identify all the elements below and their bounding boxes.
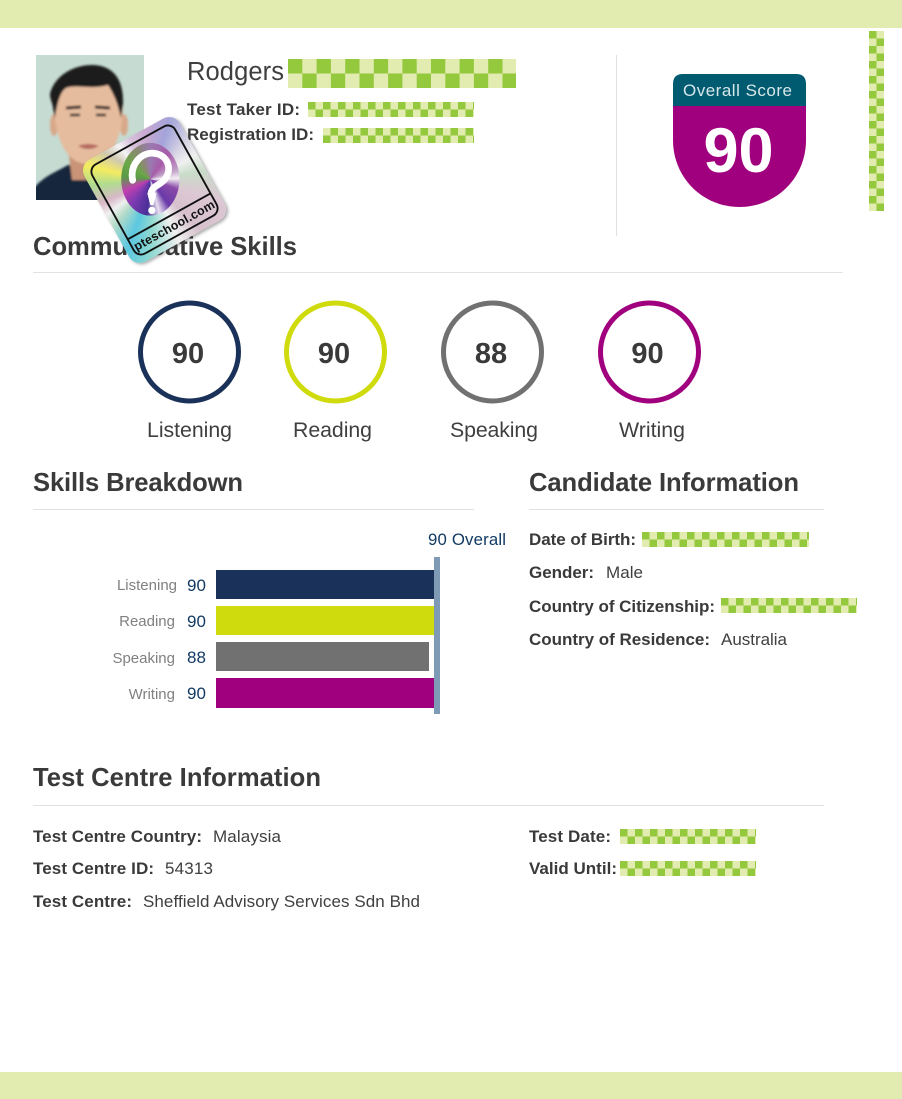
test taker id <box>187 100 474 119</box>
overall score badge: 90 <box>703 116 774 186</box>
heading: skills breakdown: Skills Breakdown <box>33 469 243 497</box>
candidate name <box>187 58 516 88</box>
score circle: writing <box>600 303 698 442</box>
valid until <box>529 859 756 878</box>
holographic sticker <box>78 113 230 267</box>
bar chart: Writing <box>129 686 175 703</box>
gender <box>529 563 643 582</box>
bar chart: Reading <box>119 613 175 630</box>
holographic sticker: pteschool.com <box>131 198 217 254</box>
bar chart: 90 <box>187 612 206 631</box>
score circle: reading <box>286 303 384 442</box>
test taker id: Test Taker ID: <box>187 100 300 119</box>
score circle: writing: 90 <box>631 338 664 370</box>
bar chart <box>112 530 506 714</box>
score circle: speaking: Speaking <box>450 418 538 442</box>
test date <box>529 827 756 846</box>
test centre name: Test Centre: <box>33 892 132 911</box>
valid until: Valid Until: <box>529 859 617 878</box>
score circle: listening: Listening <box>147 418 232 442</box>
date of birth: Date of Birth: <box>529 530 636 549</box>
test centre id <box>33 859 213 878</box>
candidate name: Rodgers <box>187 58 284 86</box>
bar chart: Speaking <box>112 650 175 667</box>
test centre name: Sheffield Advisory Services Sdn Bhd <box>143 892 420 911</box>
test centre country: Malaysia <box>213 827 282 846</box>
overall score badge <box>673 74 806 207</box>
gender: Gender: <box>529 563 594 582</box>
bar chart: 90 <box>187 576 206 595</box>
test date: Test Date: <box>529 827 611 846</box>
country of citizenship: Country of Citizenship: <box>529 597 715 616</box>
test centre country: Test Centre Country: <box>33 827 202 846</box>
test centre id: 54313 <box>165 859 213 878</box>
bar chart: Listening <box>117 577 177 594</box>
gender: Male <box>606 563 643 582</box>
score circle: reading: Reading <box>293 418 372 442</box>
heading: test centre information: Test Centre Information <box>33 764 321 792</box>
registration id <box>187 125 474 144</box>
country of residence: Country of Residence: <box>529 630 710 649</box>
date of birth <box>529 530 809 549</box>
vertical redaction strip <box>869 31 884 211</box>
bottom band <box>0 1072 902 1099</box>
bar chart: 90 <box>187 684 206 703</box>
bar chart: 90 Overall <box>428 530 506 549</box>
test centre country <box>33 827 282 846</box>
score circle: writing: Writing <box>619 418 685 442</box>
score circle: speaking: 88 <box>475 338 507 370</box>
top band <box>0 0 902 28</box>
overall score badge: Overall Score <box>683 81 792 100</box>
bar chart: 88 <box>187 648 206 667</box>
score circle: reading: 90 <box>318 338 350 370</box>
country of citizenship <box>529 597 857 616</box>
divider <box>616 55 617 236</box>
score circle: speaking <box>444 303 542 442</box>
candidate photo <box>34 55 146 202</box>
registration id: Registration ID: <box>187 125 314 144</box>
score circle: listening: 90 <box>172 338 204 370</box>
heading: communicative skills: Communicative Skills <box>33 233 297 261</box>
country of residence: Australia <box>721 630 788 649</box>
score circle: listening <box>140 303 238 442</box>
heading: candidate information: Candidate Information <box>529 469 799 497</box>
test centre id: Test Centre ID: <box>33 859 154 878</box>
